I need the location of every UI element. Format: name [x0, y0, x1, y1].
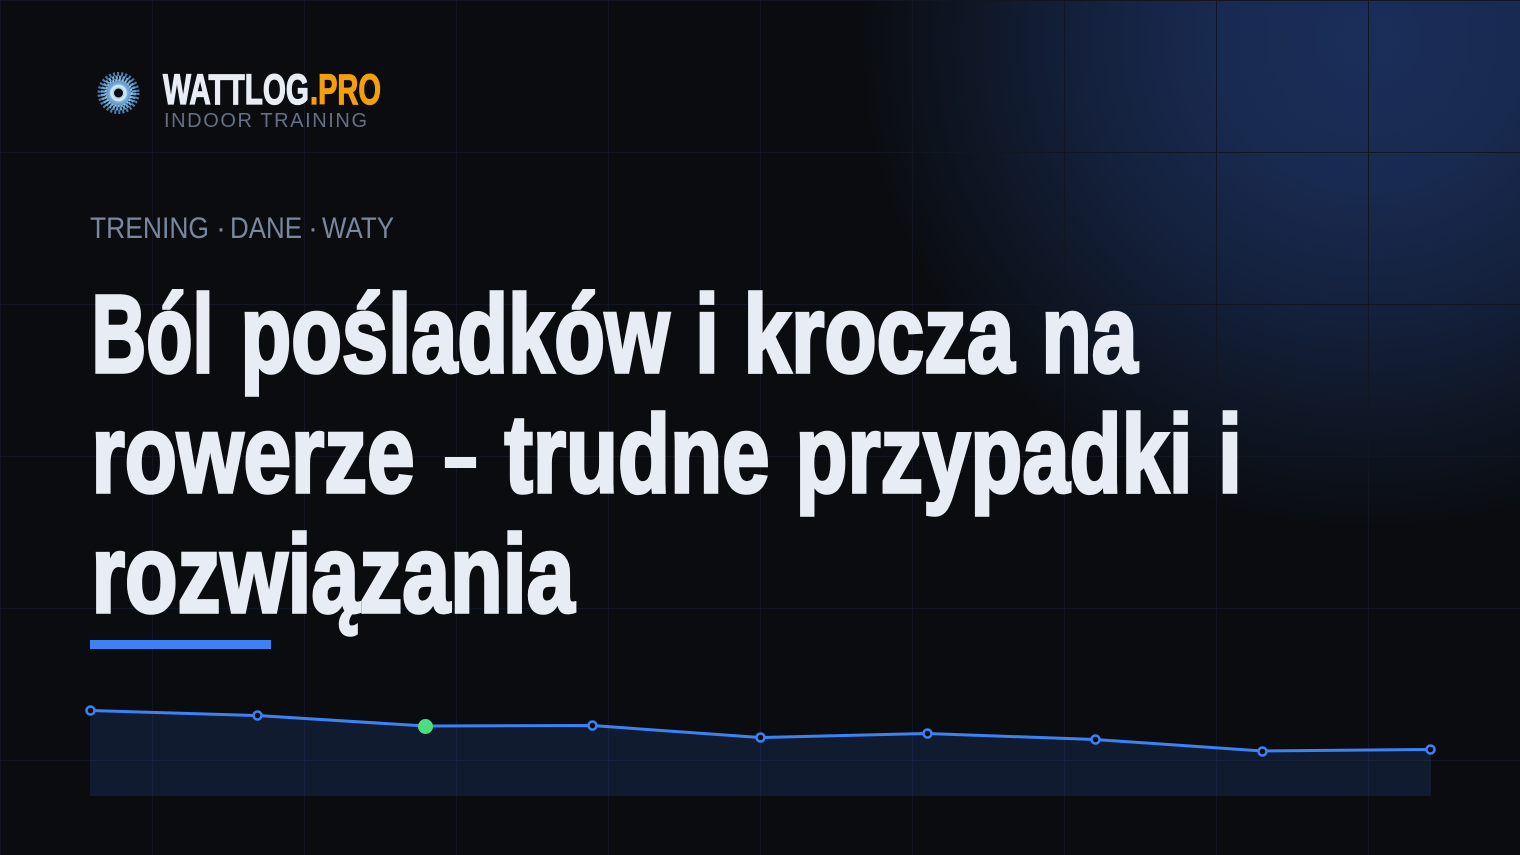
- eyebrow: ·: [216, 212, 226, 245]
- title: –: [443, 393, 478, 516]
- tagline: INDOOR TRAINING: [164, 110, 367, 132]
- title: krocza: [744, 273, 1015, 396]
- title: trudne: [504, 393, 770, 516]
- title: rowerze: [92, 393, 414, 516]
- accent underline: [90, 640, 271, 649]
- title: przypadki: [796, 393, 1192, 516]
- title: i: [1218, 393, 1242, 516]
- icon: bicycle cassette: [100, 74, 138, 112]
- title: pośladków: [240, 273, 670, 396]
- eyebrow: DANE: [230, 212, 302, 245]
- title: i: [695, 273, 719, 396]
- logo: WattLog.pro brand: [100, 66, 381, 132]
- eyebrow: WATY: [322, 212, 394, 245]
- wordmark: .PRO: [310, 66, 381, 114]
- eyebrow: [90, 212, 394, 245]
- line chart: power trend: [86, 706, 1434, 796]
- title: Ból: [92, 273, 214, 396]
- chart area fill: [90, 710, 1431, 796]
- data points: [86, 706, 1434, 756]
- title: [92, 273, 1242, 636]
- wordmark: WATTLOG: [163, 66, 309, 114]
- highlighted data point: [418, 719, 433, 734]
- chart line: [90, 710, 1430, 751]
- title: rozwiązania: [92, 513, 575, 636]
- title: na: [1042, 273, 1138, 396]
- eyebrow: ·: [308, 212, 318, 245]
- eyebrow: TRENING: [90, 212, 209, 245]
